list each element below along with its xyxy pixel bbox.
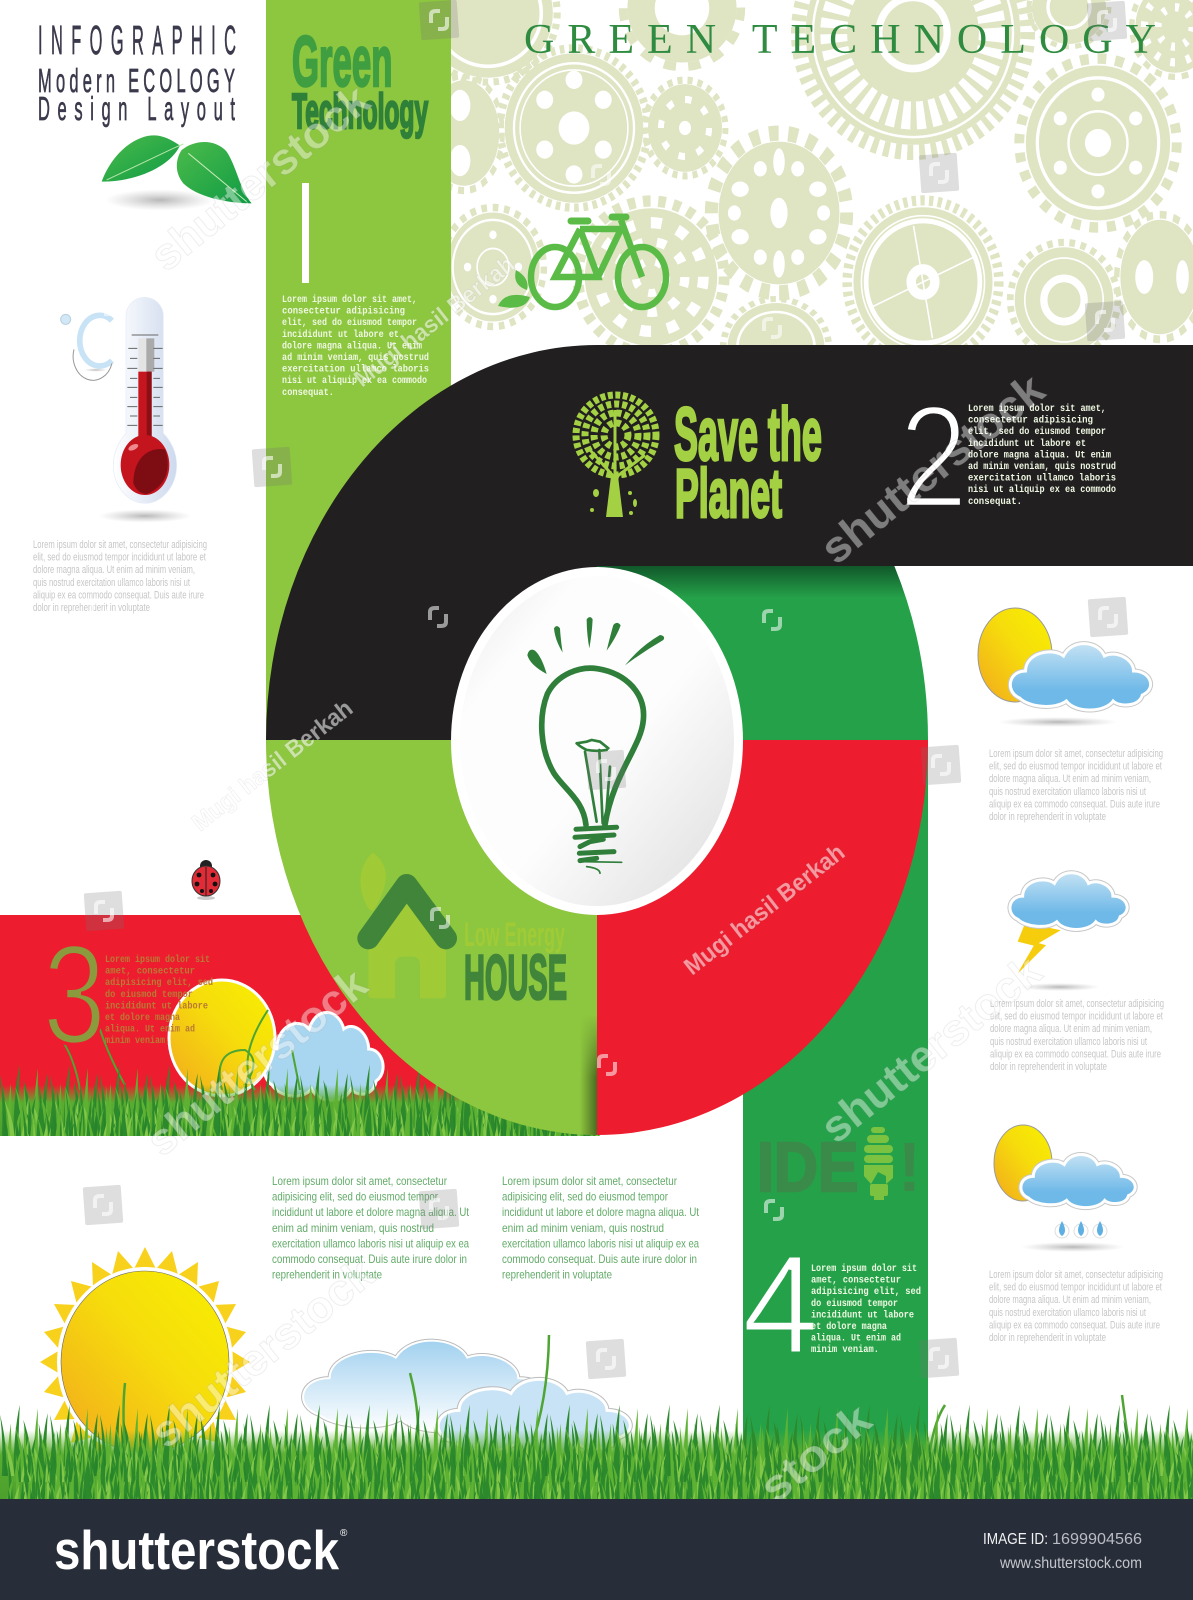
text block 1: exercitation ullamco laboris — [282, 364, 429, 376]
icon: big clouds — [303, 1341, 630, 1455]
text block 3: minim veniam. — [105, 1035, 170, 1047]
watermark stamps — [83, 0, 1128, 1379]
text block 1: consequat. — [282, 388, 334, 399]
shadow under black band — [597, 566, 904, 594]
text block 2: nisi ut aliquip ex ea commodo — [968, 484, 1116, 496]
text block 4: incididunt ut labore — [811, 1309, 914, 1321]
text block 1: consectetur adipisicing — [282, 306, 405, 318]
shutterstock watermarks: Mugi hasil Berkah — [187, 695, 358, 837]
heading: IDEA — [757, 1127, 921, 1206]
heading: IDEA: IDE — [757, 1128, 858, 1206]
quadrant: green top right — [597, 566, 928, 740]
numeral 3: 3 — [43, 916, 106, 1074]
text block right 1 — [989, 748, 1163, 823]
text block left — [33, 539, 207, 614]
title: infographic: Modern ECOLOGY — [38, 62, 235, 100]
grass on red band — [0, 1010, 600, 1136]
text block 2: exercitation ullamco laboris — [968, 473, 1116, 485]
footer logo: shutterstock — [54, 1519, 339, 1581]
title: infographic — [38, 17, 236, 128]
icon: low energy house — [360, 853, 446, 998]
text block 2: Lorem ipsum dolor sit amet, — [968, 403, 1106, 415]
text column 2: enim ad minim veniam, quis nostrud — [502, 1221, 664, 1235]
text block 2: dolore magna aliqua. Ut enim — [968, 449, 1111, 461]
panel: green column 1 — [266, 0, 451, 745]
heading: Green Technology: Technology — [292, 85, 428, 139]
text column 2: exercitation ullamco laboris nisi ut aliquip ex ea — [502, 1236, 699, 1250]
text block left: quis nostrud exercitation ullamco laboris nisi ut — [33, 577, 190, 589]
footer image id: IMAGE ID: — [983, 1531, 1048, 1548]
text block 3: et dolore magna — [105, 1012, 180, 1024]
icon: leaves — [102, 135, 252, 211]
text block 2 — [968, 403, 1116, 508]
numeral 4: 4 — [742, 1226, 819, 1383]
text column 2 — [502, 1174, 700, 1282]
shutterstock watermarks: Mugi hasil Berkah — [679, 839, 850, 981]
shutterstock watermarks — [137, 75, 1054, 1513]
text block right 3: dolor in reprehenderit in voluptate — [989, 1332, 1106, 1344]
heading: Save the Planet: Planet — [675, 455, 782, 532]
text column 2: adipisicing elit, sed do eiusmod tempor — [502, 1190, 668, 1204]
title: infographic: Design Layout — [38, 90, 235, 128]
text block 1: nisi ut aliquip ex ea commodo — [282, 375, 427, 387]
heading: Save the Planet: Save the — [674, 394, 822, 477]
text block left: Lorem ipsum dolor sit amet, consectetur adipisicing — [33, 539, 207, 551]
footer image id: www.shutterstock.com — [999, 1555, 1142, 1572]
text block right 2: dolor in reprehenderit in voluptate — [990, 1061, 1107, 1073]
icon: thermometer — [61, 297, 192, 523]
text block 3: aliqua. Ut enim ad — [105, 1024, 195, 1036]
text column 1: adipisicing elit, sed do eiusmod tempor — [272, 1190, 438, 1204]
title: infographic: INFOGRAPHIC — [38, 17, 236, 63]
icon: sun cloud rain — [994, 1125, 1135, 1252]
text column 1: reprehenderit in voluptate — [272, 1268, 382, 1282]
text block 4: amet, consectetur — [811, 1276, 901, 1287]
text column 1: commodo consequat. Duis aute irure dolor in — [272, 1252, 467, 1266]
text column 1: Lorem ipsum dolor sit amet, consectetur — [272, 1174, 447, 1188]
text block 1: Lorem ipsum dolor sit amet, — [282, 294, 417, 306]
footer bar — [0, 1499, 1193, 1600]
sun and cloud on red band — [169, 980, 383, 1101]
icon: bicycle — [498, 217, 666, 308]
text block 1: dolore magna aliqua. Ut enim — [282, 340, 422, 352]
text block 3: incididunt ut labore — [105, 1000, 208, 1012]
shutterstock watermarks: shutterstock — [811, 946, 1051, 1153]
text block left: dolore magna aliqua. Ut enim ad minim veniam, — [33, 564, 195, 576]
shutterstock watermarks: shutterstock — [141, 75, 379, 281]
text block left: elit, sed do eiusmod tempor incididunt ut labore et — [33, 552, 206, 564]
central disc — [451, 567, 743, 915]
heading: Low Energy HOUSE: HOUSE — [464, 944, 567, 1013]
shutterstock watermarks: stock — [750, 1394, 881, 1513]
text block 4 — [811, 1263, 921, 1356]
text column 1: enim ad minim veniam, quis nostrud — [272, 1221, 434, 1235]
text block left: aliquip ex ea commodo consequat. Duis aute irure — [33, 589, 204, 601]
text block right 3 — [989, 1269, 1163, 1344]
text block 4: adipisicing elit, sed — [811, 1286, 921, 1298]
panel: green column 4 — [743, 740, 928, 1500]
icon: light bulb — [527, 617, 664, 873]
icon: sun and cloud — [978, 608, 1151, 727]
icon: storm cloud — [1010, 873, 1127, 991]
text column 1: incididunt ut labore et dolore magna aliqua. Ut — [272, 1205, 470, 1219]
text block 4: do eiusmod tempor — [811, 1298, 898, 1310]
text block 4: Lorem ipsum dolor sit — [811, 1263, 917, 1275]
footer logo: ® — [340, 1528, 348, 1539]
gear pattern background — [451, 0, 1193, 345]
text block 3: amet, consectetur — [105, 967, 195, 978]
quadrant: light green lower left — [266, 740, 597, 1135]
text block 2: consectetur adipisicing — [968, 415, 1093, 427]
heading: Save the Planet — [674, 394, 822, 532]
text column 2: Lorem ipsum dolor sit amet, consectetur — [502, 1174, 677, 1188]
quadrant: black ring with band — [266, 345, 1193, 740]
text column 2: commodo consequat. Duis aute irure dolor in — [502, 1252, 697, 1266]
text column 2: reprehenderit in voluptate — [502, 1268, 612, 1282]
text block 4: minim veniam. — [811, 1344, 879, 1356]
numeral 1 — [302, 183, 309, 283]
heading: IDEA: ! — [898, 1128, 921, 1206]
text block 2: ad minim veniam, quis nostrud — [968, 461, 1116, 473]
text block 1: incididunt ut labore et — [282, 329, 399, 341]
text block 3 — [105, 954, 213, 1047]
grass foreground — [0, 1335, 1193, 1532]
icon: big sun — [40, 1247, 250, 1477]
text block 2: consequat. — [968, 497, 1022, 508]
text column 2: incididunt ut labore et dolore magna aliqua. Ut — [502, 1205, 700, 1219]
heading: GREEN TECHNOLOGY: GREEN TECHNOLOGY — [524, 17, 1156, 63]
text block right 1: dolor in reprehenderit in voluptate — [989, 811, 1106, 823]
quadrant: red lower right — [597, 740, 928, 1135]
text block 1: elit, sed do eiusmod tempor — [282, 317, 417, 329]
text block 3: adipisicing elit, sed — [105, 977, 213, 989]
text block 4: et dolore magna — [811, 1321, 887, 1333]
heading: Green Technology: Green — [292, 21, 392, 101]
icon: ladybug — [192, 860, 220, 900]
text block right 2 — [990, 998, 1164, 1073]
text block 2: elit, sed do eiusmod tempor — [968, 426, 1106, 438]
shutterstock watermarks: shutterstock — [811, 364, 1054, 574]
shadow on quadrant seam — [582, 1021, 597, 1135]
text block 3: Lorem ipsum dolor sit — [105, 954, 210, 966]
text block 2: incididunt ut labore et — [968, 438, 1086, 450]
shutterstock watermarks: shutterstock — [137, 959, 377, 1166]
text block 1: ad minim veniam, quis nostrud — [282, 352, 429, 364]
heading: Green Technology — [292, 21, 428, 139]
icon: tree — [576, 395, 656, 517]
panel: red band 3 — [0, 915, 600, 1136]
numeral 2: 2 — [899, 374, 968, 538]
text block 4: aliqua. Ut enim ad — [811, 1333, 901, 1345]
footer image id — [983, 1531, 1142, 1572]
shutterstock watermarks: Mugi hasil Berkah — [349, 251, 520, 393]
text block 3: do eiusmod tempor — [105, 989, 193, 1001]
text column 1: exercitation ullamco laboris nisi ut aliquip ex ea — [272, 1236, 469, 1250]
text column 1 — [272, 1174, 470, 1282]
footer image id: 1699904566 — [1052, 1531, 1142, 1548]
text block left: dolor in reprehenderit in voluptate — [33, 602, 150, 614]
shutterstock watermarks: shutterstock — [141, 1248, 384, 1458]
heading: Low Energy HOUSE: Low Energy — [464, 915, 565, 954]
text block 1 — [282, 294, 429, 399]
